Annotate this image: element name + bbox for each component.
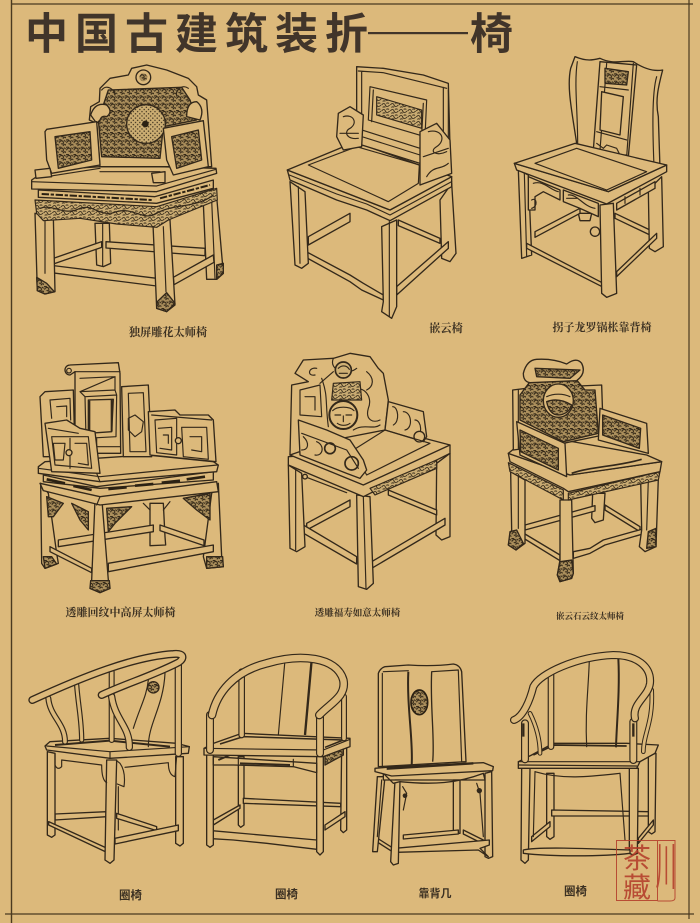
- chair 10: 圈椅: [514, 655, 658, 863]
- chair 2: 嵌云椅: [287, 67, 456, 318]
- red seal: 川: [656, 839, 676, 897]
- red seal: [616, 839, 676, 903]
- chair 7: 圈椅: [32, 654, 189, 863]
- red seal: 藏: [623, 872, 651, 903]
- caption: 圈椅 (second): 圈椅: [275, 887, 298, 901]
- caption: 圈椅 (right): 圈椅: [564, 884, 587, 898]
- caption: 透雕福寿如意太师椅: 透雕福寿如意太师椅: [315, 607, 401, 619]
- caption: 嵌云石云纹太师椅: 嵌云石云纹太师椅: [556, 611, 624, 621]
- caption: 独屏雕花太师椅: 独屏雕花太师椅: [129, 325, 208, 339]
- chair 9: 靠背几: [373, 664, 493, 865]
- caption: 圈椅 (left): 圈椅: [119, 888, 142, 902]
- chair 6: 嵌云石云纹太师椅: [508, 359, 662, 582]
- chair 1: 独屏雕花太师椅: [32, 65, 223, 312]
- red seal: 茶: [623, 843, 651, 874]
- caption: 靠背几: 靠背几: [418, 886, 452, 900]
- chair 3: 拐子龙罗锅枨靠背椅: [514, 57, 667, 297]
- caption: 拐子龙罗锅枨靠背椅: 拐子龙罗锅枨靠背椅: [552, 320, 652, 334]
- chair 8: 圈椅: [204, 658, 350, 855]
- caption: 嵌云椅: 嵌云椅: [429, 321, 464, 335]
- title: 中国古建筑装折: [25, 11, 375, 59]
- chair 5: 透雕福寿如意太师椅: [288, 353, 450, 589]
- chair 4: 透雕回纹中高屏太师椅: [38, 363, 223, 593]
- caption: 透雕回纹中高屏太师椅: 透雕回纹中高屏太师椅: [66, 605, 176, 619]
- title: 椅: [470, 11, 513, 59]
